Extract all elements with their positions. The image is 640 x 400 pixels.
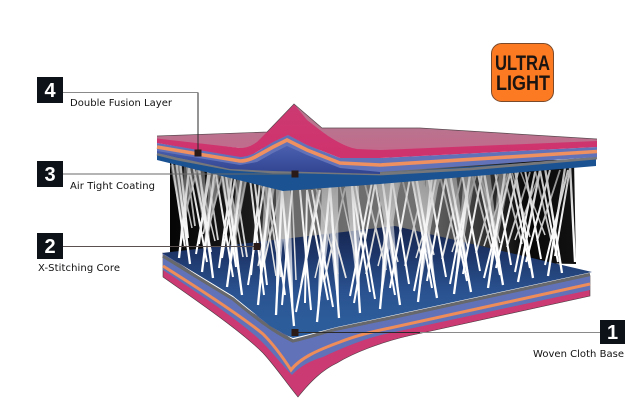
callout 1: woven cloth base: 1 [607,322,618,344]
panel: woven base top surface [162,226,592,338]
callout 4: double fusion layer: 4 [44,80,56,102]
crimson base layer [163,253,590,397]
panel: lower base layers [163,253,590,397]
back outline [157,104,597,139]
needle row far back [178,162,545,280]
icon: ultra light badge: ULTRA [495,52,550,75]
callout 3: air tight coating [37,161,298,192]
needle row middle [180,160,570,303]
pink top surface [157,104,597,151]
lavender lower layer [163,253,590,375]
orange lower layer [163,266,590,370]
callout 3: air tight coating: Air Tight Coating [70,181,155,192]
needle haze fans [170,165,511,326]
callout 2: x-stitching core: 2 [44,236,56,258]
callout 4: double fusion layer: Double Fusion Layer [70,98,173,109]
callout 1: woven cloth base [292,320,625,360]
callout 2: x-stitching core [37,233,260,274]
panel: upper fusion layers [157,104,597,191]
panel: needle background [170,160,576,264]
icon: ultra light badge [492,44,554,102]
icon: ultra light badge: LIGHT [496,72,550,95]
dark blue under peak [157,142,380,174]
needle row near [172,162,568,312]
gray lower coating [163,256,590,341]
callout 4: double fusion layer [37,77,202,156]
needle row back [183,160,560,285]
needle row front [176,160,575,326]
dark blue top cloth [157,153,596,191]
callout 1: woven cloth base: Woven Cloth Base [533,349,624,360]
callout 2: x-stitching core: X-Stitching Core [38,263,120,274]
lavender upper layers [157,135,597,172]
crimson edge and peak [157,104,597,158]
orange upper layer [157,140,597,165]
callout 3: air tight coating: 3 [44,164,56,186]
gray coating stripe [157,154,597,174]
chart: x-stitching needles [170,160,575,326]
